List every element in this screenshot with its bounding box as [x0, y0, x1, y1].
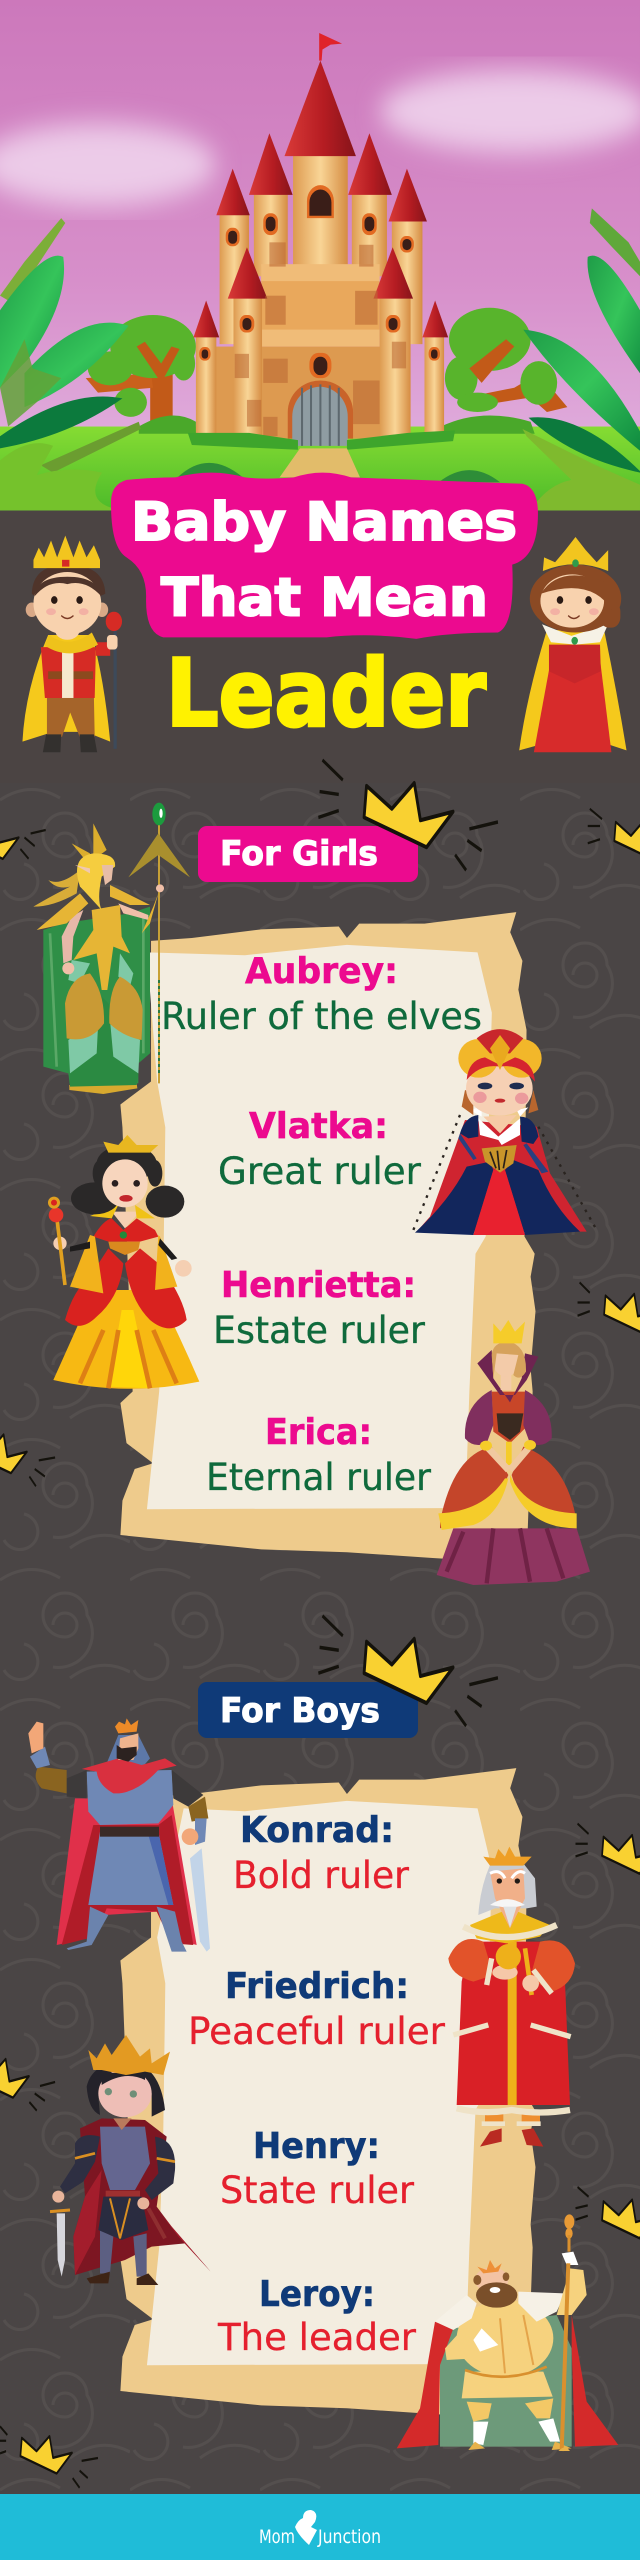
- hedge: [188, 430, 455, 450]
- fat king with sceptre: [397, 2214, 618, 2451]
- roofs front: [193, 247, 448, 337]
- boys names list: [188, 1810, 446, 2359]
- queen with navy gown: [413, 1029, 597, 1235]
- girls names list: Aubrey:: [245, 951, 398, 992]
- boys names list: Konrad:: [240, 1810, 394, 1851]
- gate: [288, 380, 353, 439]
- badge: for girls: For Girls: [220, 834, 378, 874]
- girls scroll: [120, 912, 536, 1564]
- tree left: [86, 315, 196, 422]
- crown top left: [0, 820, 46, 859]
- girls names list: Erica:: [265, 1412, 372, 1453]
- tree right: [445, 308, 567, 412]
- ground: [0, 427, 640, 510]
- girls names list: Ruler of the elves: [161, 995, 482, 1038]
- boys names list: Leroy:: [259, 2274, 375, 2315]
- girls names list: [161, 951, 482, 1499]
- bricks: [235, 242, 406, 436]
- hero castle scene: [0, 0, 640, 752]
- old king with orb: [448, 1847, 575, 2147]
- crown lower right: [576, 2187, 640, 2238]
- girls names list: Henrietta:: [221, 1265, 416, 1306]
- panel: for girls: [33, 803, 597, 1585]
- title: [131, 492, 517, 748]
- path: [280, 448, 360, 477]
- logo: [259, 2510, 381, 2548]
- crown mid left: [0, 1435, 55, 1486]
- footer: [0, 2494, 640, 2560]
- king with blue tunic: [28, 1718, 210, 1952]
- boys scroll: [120, 1768, 536, 2420]
- boys names list: Peaceful ruler: [188, 2010, 446, 2053]
- clouds: [0, 70, 640, 206]
- dark armoured king: [50, 2035, 211, 2285]
- icon: mother and child: [295, 2510, 317, 2545]
- title: Baby Names: [131, 492, 517, 553]
- panel: for boys: [28, 1682, 618, 2451]
- crown mid left: [0, 2059, 55, 2111]
- roofs back: [216, 61, 427, 222]
- crown bottom left: [0, 2426, 98, 2488]
- crown upper right: [576, 1824, 640, 1874]
- elf queen: [33, 803, 190, 1094]
- windows: [199, 185, 440, 378]
- title bubble: [111, 473, 538, 639]
- girls names list: Vlatka:: [249, 1106, 388, 1147]
- towers back: [220, 155, 422, 344]
- patterned background: [0, 783, 640, 2494]
- prince: [22, 536, 122, 752]
- far bushes: [139, 415, 535, 434]
- crown top centre: [318, 1616, 498, 1726]
- sky: [0, 0, 640, 510]
- front towers: [196, 297, 444, 439]
- girls names list: Great ruler: [218, 1150, 422, 1193]
- badge: for boys: For Boys: [220, 1691, 380, 1731]
- logo: Mom: [259, 2526, 295, 2548]
- girls names list: Eternal ruler: [206, 1456, 432, 1499]
- girls names list: Estate ruler: [213, 1309, 426, 1352]
- boys names list: State ruler: [220, 2169, 415, 2212]
- logo: Junction: [317, 2526, 381, 2548]
- boys names list: The leader: [217, 2316, 417, 2359]
- flag: [319, 33, 342, 61]
- queen with yellow gown: [48, 1135, 199, 1389]
- title: That Mean: [161, 568, 488, 628]
- queen with maroon gown: [437, 1320, 590, 1585]
- crown mid right: [578, 1282, 640, 1332]
- crown top right: [588, 809, 640, 859]
- badge: for boys: [198, 1682, 418, 1738]
- boys names list: Henry:: [253, 2126, 380, 2167]
- right foliage: [439, 208, 640, 510]
- boys names list: Friedrich:: [225, 1966, 409, 2007]
- crowns: girls section: [0, 760, 640, 1486]
- castle: [188, 33, 455, 477]
- crowns: boys section: [0, 1616, 640, 2488]
- left foliage: [0, 218, 243, 510]
- boys names list: Bold ruler: [233, 1854, 410, 1897]
- title: Leader: [166, 640, 486, 748]
- badge: for girls: [198, 826, 418, 882]
- crown top centre: [318, 760, 498, 870]
- princess: [519, 537, 627, 752]
- main walls: [261, 267, 380, 337]
